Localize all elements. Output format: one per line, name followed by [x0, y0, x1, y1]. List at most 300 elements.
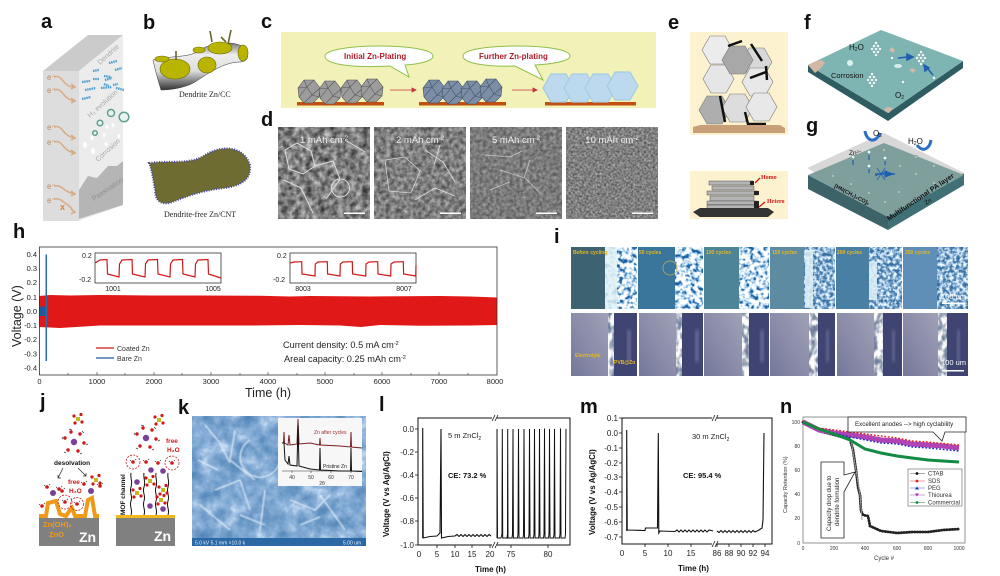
axes [622, 418, 772, 544]
x tick labels: 15 [468, 550, 477, 559]
x tick labels: 80 [544, 550, 553, 559]
x-axis tick labels: 7000 [431, 377, 447, 386]
SEM 2 mAh [374, 127, 466, 219]
yellow MOF base [116, 515, 175, 518]
y tick labels: -0.4 [400, 471, 415, 480]
legend: SDS [928, 479, 940, 485]
inset: 1001-1005: 0.2 [82, 253, 92, 260]
y-axis title: Voltage (V vs Ag/AgCl) [382, 451, 391, 537]
y-axis tick labels: 0.2 [27, 278, 37, 287]
SEM 10 mAh: -2 [633, 136, 639, 142]
callout: capacity drop [821, 462, 855, 538]
inset: 1001-1005: -0.2 [79, 277, 91, 284]
slab right face [79, 35, 123, 221]
free water label left: free [68, 479, 80, 486]
face labels [87, 44, 125, 203]
single ions and pit [847, 56, 936, 84]
H2O label: 2 [914, 141, 917, 147]
desolvation arrows [58, 468, 86, 478]
top row electrode textures [605, 247, 968, 309]
y-axis tick labels: -0.2 [24, 335, 37, 344]
y-axis tick labels: 0.3 [27, 264, 37, 273]
inset: 8003-8007: 8003 [295, 286, 311, 293]
Zn slab left side [808, 175, 888, 230]
SEM metadata: 5.0 kV 5.1 mm ×10.0 k [195, 540, 246, 546]
test conditions: Areal capacity: 0.25 mAh cm [284, 354, 401, 364]
PEG markers [803, 423, 959, 451]
label d: d [261, 109, 273, 131]
MOF chains [130, 473, 169, 515]
PVB caption: PVB@Zn [614, 360, 635, 366]
SEM 5 mAh: 5 mAh cm [492, 135, 535, 146]
right Zn block [116, 518, 175, 546]
CE label: CE: 73.2 % [448, 471, 487, 480]
corrosion dots [83, 123, 120, 154]
x tick labels: 600 [893, 546, 901, 552]
polyamide formula: [HN(CH₂)₅CO]ₙ [833, 183, 871, 207]
electrolyte caption: Electrolyte [575, 353, 601, 359]
blocked dendrite arrow [875, 168, 895, 180]
legend: Commercial [928, 500, 960, 506]
x-axis tick labels: 3000 [203, 377, 219, 386]
multifunctional label: Multifunctional PA layer [886, 173, 956, 223]
SEM 2 mAh: -2 [439, 136, 445, 142]
panel j: desolvation schematic [39, 391, 180, 546]
x tick labels: 200 [830, 546, 838, 552]
y tick labels: 0.0 [607, 429, 619, 438]
legend: PEG [928, 486, 941, 492]
corrosion label: Corrosion [831, 71, 864, 80]
H2O label: O [917, 137, 923, 146]
x tick labels: 75 [507, 550, 516, 559]
y-axis title: Capacity Retention (%) [783, 456, 789, 513]
x tick labels [802, 546, 965, 552]
panel g: polyamide layer [806, 115, 964, 230]
Zn label: Zn [924, 198, 933, 207]
x tick labels: 1000 [953, 546, 965, 552]
x tick labels: 86 [713, 549, 722, 558]
ticks [619, 418, 765, 547]
white plated strips [605, 247, 877, 309]
SEM 1 mAh: 1 mAh cm [300, 135, 343, 146]
electron labels: e⁻ [47, 73, 56, 82]
inset: 1001-1005 [79, 253, 221, 293]
x-axis tick labels: 4000 [260, 377, 276, 386]
concentration label: 5 m ZnCl [448, 431, 478, 440]
CE label: CE: 95.4 % [683, 471, 722, 480]
panel m: 30 m ZnCl2 CE chart [580, 396, 772, 573]
x tick labels: 10 [451, 550, 460, 559]
top row captions [573, 250, 930, 256]
Zn label right: Zn [154, 528, 171, 544]
x tick labels: 10 [664, 549, 673, 558]
x-axis tick labels: 1000 [89, 377, 105, 386]
H2O label: 2 [855, 47, 858, 53]
plate dark edges [750, 181, 759, 209]
x-axis title: Time (h) [678, 564, 709, 573]
dark base [693, 208, 774, 217]
stacked plates [707, 181, 757, 209]
inset: 8003-8007: 0.2 [277, 253, 287, 260]
panel f: corrosion surface [804, 12, 963, 121]
electron labels: e⁻ [47, 86, 56, 95]
panel l: 5 m ZnCl2 CE chart [379, 394, 570, 574]
x-axis title: Cycle # [874, 556, 895, 562]
Zn(OH)2 label: Zn(OH)₂ [43, 520, 72, 529]
H2O label: H [849, 43, 855, 52]
face labels: Corrosion [95, 138, 122, 163]
XRD inset: 40 [289, 475, 295, 481]
face labels: Passivation [91, 177, 125, 203]
voltage trace left [423, 428, 491, 538]
ticks [68, 372, 468, 375]
O2 label: O [873, 129, 879, 138]
substrate bars [297, 102, 636, 106]
axis tick labels: 80 [794, 444, 800, 450]
x tick labels: 0 [417, 550, 422, 559]
hydrogen bubbles [93, 110, 129, 135]
y tick labels: -0.6 [604, 518, 619, 527]
y tick labels: -0.4 [604, 488, 619, 497]
y tick labels: -0.1 [604, 444, 619, 453]
SEM 10 mAh: 10 mAh cm [585, 135, 633, 146]
Zn slab right side [888, 173, 964, 230]
axis tick labels: 40 [794, 492, 800, 498]
x tick labels: 92 [749, 549, 758, 558]
SEM 1 mAh: -2 [343, 136, 349, 142]
surface dots [831, 148, 936, 204]
axis tick labels: 20 [794, 516, 800, 522]
dashed circle highlight [663, 261, 677, 275]
top row captions: 250 cycles [905, 250, 930, 256]
zinc clusters [866, 41, 927, 88]
panel n: capacity retention chart [780, 396, 966, 562]
panel c: Zn plating schematic [261, 11, 656, 108]
blue SEM image [192, 416, 366, 546]
SEM 5 mAh [470, 127, 562, 219]
concentration label: 30 m ZnCl [692, 432, 727, 441]
light blue coated polyhedra [543, 72, 638, 102]
SDS markers [803, 421, 959, 445]
y tick labels: -0.2 [604, 459, 619, 468]
red pointer arrows [755, 178, 765, 207]
label h: h [13, 221, 25, 243]
dendrites [82, 61, 124, 99]
x-axis tick labels: 0 [37, 377, 42, 386]
label f: f [804, 12, 811, 34]
voltage trace [627, 430, 764, 533]
panel d: SEM images [261, 109, 658, 219]
passivation layer [79, 161, 123, 219]
x tick labels: 5 [435, 550, 440, 559]
electron labels: e⁻ [47, 123, 56, 132]
x tick labels: 0 [802, 546, 805, 552]
curved blue arrows [865, 131, 931, 149]
y tick labels: -0.7 [604, 533, 619, 542]
panel i: optical micrographs [554, 226, 968, 376]
y tick labels: -0.5 [604, 503, 619, 512]
SEM 2 mAh: 2 mAh cm [396, 135, 439, 146]
orange passivation layer [39, 498, 99, 516]
bottom row streaks [627, 330, 960, 362]
y tick labels: -0.2 [400, 448, 415, 457]
y-axis tick labels: 0.0 [27, 307, 37, 316]
legend: CTAB [928, 472, 944, 478]
bottom row bright strips [608, 313, 947, 376]
label m: m [580, 396, 598, 418]
bottom info bar [192, 538, 366, 546]
y-axis tick labels: -0.4 [24, 364, 37, 372]
panel a: battery slab schematic [41, 11, 129, 221]
corrosion patches [808, 47, 916, 113]
y-axis tick labels: 0.1 [27, 293, 37, 302]
legend [908, 469, 962, 506]
legend: Coated Zn [117, 346, 150, 353]
y-axis tick labels: -0.1 [24, 321, 37, 330]
axes [418, 418, 570, 545]
top row left electrolyte regions [571, 247, 937, 309]
y-axis title: Voltage (V vs Ag/AgCl) [588, 449, 597, 535]
Hetero label: Hetero [767, 199, 785, 205]
label n: n [780, 396, 792, 418]
panel h: long-term voltage chart [10, 221, 503, 400]
Zn2+ label: 2+ [857, 149, 862, 154]
face labels: H₂ evolution [87, 89, 119, 119]
voltage trace right [497, 428, 566, 538]
axis tick labels: 0 [797, 541, 800, 547]
top scale bar: 100 μm [941, 292, 966, 301]
free water label right: free [166, 438, 178, 445]
XRD inset: Pristine Zn [323, 464, 347, 470]
x-axis tick labels [37, 377, 503, 386]
x tick labels: 94 [761, 549, 770, 558]
top row captions: 100 cycles [706, 250, 731, 256]
free water label right: H₂O [167, 447, 180, 454]
label a: a [41, 11, 53, 33]
panel b: dendrite tubes [143, 12, 250, 219]
callout: capacity drop: dendrite formation [835, 478, 841, 526]
SDS, PEG and thiourea band [803, 422, 959, 448]
Zn2+ label: Zn [849, 150, 857, 157]
y tick labels: 0.0 [403, 425, 415, 434]
callout: capacity drop: Capacity drop due to [827, 475, 833, 531]
label i: i [554, 226, 560, 248]
test conditions: -2 [394, 341, 399, 347]
axis tick labels: 60 [794, 468, 800, 474]
red arrows [390, 88, 537, 92]
ZnO label: ZnO [49, 530, 64, 539]
inset: 1001-1005: 1001 [105, 286, 121, 293]
label j: j [39, 391, 46, 413]
label g: g [806, 115, 818, 137]
y tick labels [604, 414, 619, 542]
electron labels [47, 73, 56, 205]
axis tick labels [792, 420, 800, 547]
bottom row dark regions [614, 313, 968, 376]
slab sides [808, 61, 963, 121]
electron arrows [54, 77, 75, 214]
x-axis title: Time (h) [245, 386, 291, 400]
solvated ions and sulfates [39, 413, 175, 512]
label l: l [379, 394, 385, 416]
black plate edges [720, 41, 767, 124]
test conditions: Current density: 0.5 mA cm [283, 340, 394, 350]
x tick labels: 5 [643, 549, 648, 558]
platform [693, 125, 785, 133]
bubble: initial plating [325, 46, 433, 77]
CTAB series [803, 422, 959, 533]
top row captions: Before cycling [573, 250, 607, 256]
label b: b [143, 12, 155, 34]
face labels: Dendrite [97, 44, 121, 66]
CTAB line [851, 440, 862, 520]
blue bare Zn band [40, 306, 46, 316]
legend: Bare Zn [117, 356, 142, 363]
y-axis tick labels: -0.3 [24, 350, 37, 358]
y tick labels: -0.3 [604, 473, 619, 482]
XRD inset [278, 418, 362, 487]
x-axis tick labels: 6000 [374, 377, 390, 386]
axes [803, 417, 965, 543]
electron labels: e⁻ [47, 196, 56, 205]
inset: 1001-1005: 1005 [205, 286, 221, 293]
blue arrows [898, 54, 933, 75]
label e: e [668, 12, 679, 34]
SEM 10 mAh [566, 127, 658, 219]
inset: 8003-8007: -0.2 [273, 277, 285, 284]
dashed water circles [58, 455, 179, 510]
slab front face [43, 71, 79, 221]
inset: 8003-8007 [273, 253, 416, 293]
XRD inset: 2θ [319, 481, 325, 487]
bottom row left regions [571, 313, 938, 376]
O2 label: 2 [879, 133, 882, 139]
SEM scale label: 5.00 um [343, 540, 361, 546]
blue spike [46, 254, 47, 361]
x tick labels: 20 [486, 550, 495, 559]
beige background lower [690, 171, 788, 219]
yellow background [281, 32, 656, 108]
axis break marks [712, 415, 718, 547]
electron labels: e⁻ [47, 138, 56, 147]
callout: excellent anodes: Excellent anodes --> high cyclability [855, 421, 954, 428]
axes frame [40, 247, 497, 375]
legend: Thiourea [928, 493, 952, 499]
bubble: further plating [463, 46, 570, 80]
test conditions [283, 340, 406, 364]
y-axis ticks [415, 429, 548, 548]
x tick labels: 90 [737, 549, 746, 558]
y tick labels: -0.8 [400, 517, 415, 526]
MOF channel label: MOF channel [120, 474, 127, 515]
panel k: SEM with XRD inset [178, 397, 366, 546]
y tick labels: -0.6 [400, 494, 415, 503]
legend [96, 346, 150, 363]
x-axis title: Time (h) [475, 565, 506, 574]
inset: 8003-8007: 8007 [396, 286, 412, 293]
dendrite-free tube [149, 148, 250, 203]
hexagon plates [699, 36, 777, 124]
callout: excellent anodes [848, 417, 966, 441]
bubble: further plating: Further Zn-plating [479, 52, 548, 61]
blue-grey polyhedra [423, 79, 502, 104]
orange blocked mark: x [60, 202, 65, 212]
PA layer surface [808, 143, 964, 217]
XRD inset: 70 [348, 475, 354, 481]
O2 label: O [895, 91, 901, 100]
left Zn block [39, 518, 99, 546]
x tick labels: 15 [687, 549, 696, 558]
slab top [808, 30, 963, 113]
SEM 1 mAh [278, 127, 370, 219]
H2O label: O [858, 43, 864, 52]
x tick labels [417, 550, 553, 559]
concentration label: 2 [727, 437, 730, 443]
electron labels: e⁻ [47, 182, 56, 191]
O2 label: 2 [901, 95, 904, 101]
red coated Zn band [39, 295, 497, 328]
top row captions: 50 cycles [639, 250, 661, 256]
H2O label: H [908, 137, 914, 146]
x tick labels: 88 [725, 549, 734, 558]
XRD inset: 50 [308, 475, 314, 481]
beige background upper [690, 32, 788, 135]
axis break marks [492, 415, 498, 548]
desolvation label: desolvation [54, 460, 90, 467]
label c: c [261, 11, 272, 33]
x-axis tick labels: 5000 [317, 377, 333, 386]
panel e: hexagonal plate stacks [668, 12, 788, 219]
concentration label: 2 [478, 436, 481, 442]
y tick labels [400, 425, 415, 550]
Commercial series [803, 422, 959, 462]
Homo label: Homo [761, 175, 777, 181]
XRD inset: 60 [328, 475, 334, 481]
y-axis tick labels [24, 250, 37, 372]
y tick labels: -1.0 [400, 541, 415, 550]
slab top face [43, 35, 123, 71]
bottom scale bar: 100 um [941, 358, 966, 367]
label k: k [178, 397, 190, 419]
y-axis tick labels: 0.4 [27, 250, 37, 259]
grey polyhedra [298, 79, 383, 104]
x tick labels: 0 [620, 549, 625, 558]
Zn label left: Zn [79, 529, 96, 545]
XRD inset: Zn after cycles [314, 430, 347, 436]
tube with dendrites [153, 30, 248, 90]
x-axis tick labels: 8000 [487, 377, 503, 386]
free water label left: H₂O [69, 488, 82, 495]
x tick labels: 400 [861, 546, 869, 552]
x tick labels: 800 [924, 546, 932, 552]
SEM ridges [198, 425, 345, 530]
top row captions: 150 cycles [772, 250, 797, 256]
top row captions: 200 cycles [837, 250, 862, 256]
x tick labels [620, 549, 770, 558]
bubble: initial plating: Initial Zn-Plating [344, 52, 406, 61]
caption: dendrite-free Zn/CNT: Dendrite-free Zn/CNT [164, 210, 236, 219]
axis tick labels: 100 [792, 420, 800, 426]
x-axis tick labels: 2000 [146, 377, 162, 386]
caption: dendrite Zn/CC: Dendrite Zn/CC [179, 90, 231, 99]
SEM 5 mAh: -2 [535, 136, 541, 142]
zinc ions with arrows [851, 150, 887, 173]
y-axis title: Voltage (V) [10, 285, 24, 347]
y tick labels: 0.1 [607, 414, 619, 423]
test conditions: -2 [401, 355, 406, 361]
bottom scale bar [941, 358, 966, 372]
PA layer transparent rim [807, 133, 964, 217]
